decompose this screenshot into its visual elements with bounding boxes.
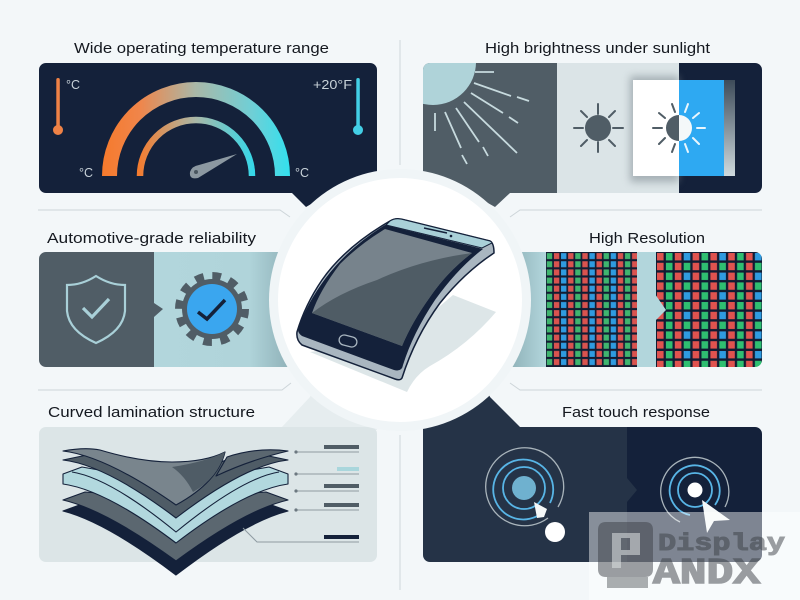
home button — [338, 334, 358, 348]
heading: high resolution: High Resolution — [589, 230, 705, 247]
peeled flap — [172, 452, 225, 492]
fast touch cursor — [702, 500, 730, 533]
heading: curved lamination structure: Curved lamination structure — [48, 404, 255, 421]
layer: navy base — [63, 503, 288, 575]
panel: lamination — [39, 385, 377, 575]
watermark text: ANDX: ANDX — [653, 553, 760, 594]
heading: fast touch response: Fast touch response — [562, 404, 710, 421]
panel: reliability — [39, 252, 295, 367]
label bottom left: °C — [79, 166, 93, 180]
pixel grid fine — [656, 252, 762, 367]
heading: high brightness under sunlight: High brightness under sunlight — [485, 40, 711, 57]
white screen half — [633, 80, 679, 176]
screen edge gradient — [724, 80, 735, 176]
icon: dim sun — [574, 104, 623, 152]
heading: automotive-grade reliability: Automotive-grade reliability — [47, 230, 257, 247]
icon: gear check — [181, 278, 243, 340]
right cyan thermometer — [353, 78, 363, 135]
layer: light blue film — [63, 467, 288, 543]
phone body — [297, 219, 494, 380]
slow touch dot — [545, 522, 565, 542]
layer: top grey sheet — [63, 449, 225, 505]
label bottom right: °C — [295, 166, 309, 180]
icon: shield check — [67, 276, 125, 343]
layer labels — [243, 445, 359, 542]
arrow notch — [656, 296, 666, 320]
pixel grid coarse — [546, 252, 637, 367]
watermark logo — [598, 522, 653, 588]
gauge needle — [190, 154, 237, 178]
blue screen half — [679, 80, 724, 176]
film divider — [72, 472, 279, 532]
screen shadow — [630, 76, 679, 182]
speaker — [424, 228, 447, 233]
centre circle — [269, 169, 531, 431]
curved phone illustration — [297, 219, 496, 392]
panel: sunlight brightness — [423, 63, 762, 207]
icon: bright sun half — [653, 104, 705, 152]
label top right: +20°F — [313, 78, 352, 92]
left orange thermometer — [53, 78, 63, 135]
slow touch pointer — [534, 502, 547, 518]
fast touch rings — [661, 457, 729, 522]
layered stack — [63, 449, 288, 575]
inner gauge arc — [140, 120, 252, 176]
layer: dark grey upper — [63, 455, 288, 518]
panel: high resolution — [505, 252, 762, 367]
phone screen — [312, 229, 472, 346]
label top left: °C — [66, 78, 80, 92]
camera dot — [450, 235, 452, 237]
watermark — [589, 512, 800, 600]
outer gauge arc — [110, 90, 282, 176]
panel: temperature gauge — [39, 63, 377, 207]
sun rays — [435, 72, 529, 164]
top strip — [386, 219, 492, 248]
watermark text: Display: Display — [658, 531, 785, 558]
phone shadow — [310, 295, 496, 392]
sun disc — [423, 63, 476, 105]
right wing — [216, 450, 288, 476]
phone front bezel — [298, 225, 483, 370]
heading: wide operating temperature range: Wide operating temperature range — [74, 40, 329, 57]
panel: fast touch response — [423, 385, 762, 562]
slow touch rings — [486, 448, 564, 526]
layer: grey lower — [63, 492, 288, 561]
screen reflection — [312, 253, 472, 346]
